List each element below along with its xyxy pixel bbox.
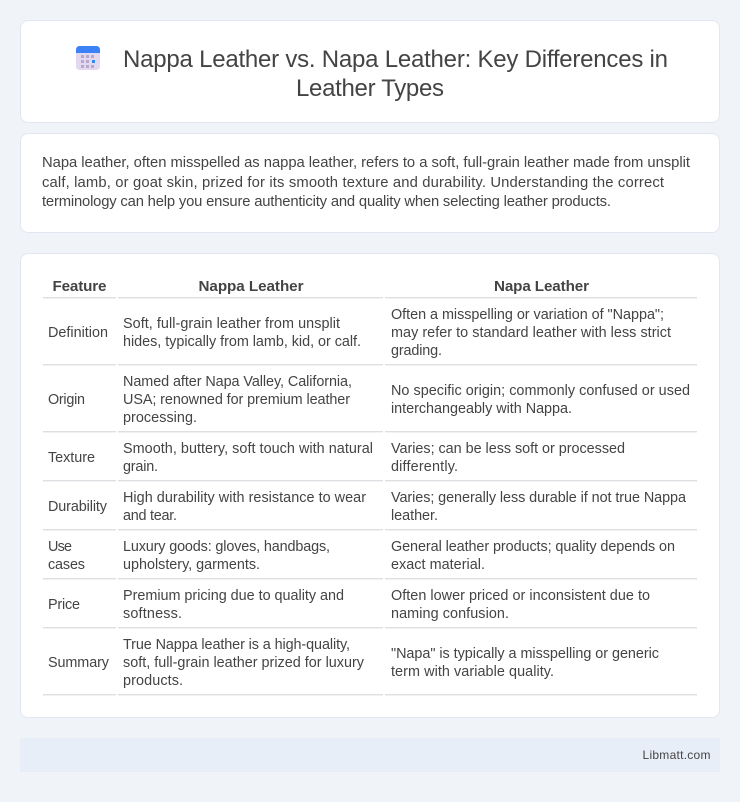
table grid (43, 297, 697, 695)
row: use cases: General leather products; quality depends on (391, 539, 675, 555)
header card (20, 20, 720, 123)
row: texture: differently. (391, 459, 458, 475)
row: origin: Named after Napa Valley, California, (123, 374, 352, 390)
intro text: calf, lamb, or goat skin, prized for its smooth texture and durability. Understanding the correct (42, 175, 664, 191)
intro text (42, 155, 690, 210)
row: definition: hides, typically from lamb, kid, or calf. (123, 334, 361, 350)
title (123, 46, 668, 102)
row: durability: Varies; generally less durable if not true Nappa (391, 490, 686, 506)
row: summary (48, 637, 659, 689)
row: texture: Texture (48, 450, 95, 466)
row: summary: "Napa" is typically a misspelling or generic (391, 646, 659, 662)
table header row: Napa Leather (494, 278, 589, 295)
row: origin: No specific origin; commonly confused or used (391, 383, 690, 399)
title: Leather Types (296, 75, 444, 102)
row: summary: products. (123, 673, 183, 689)
row: definition (48, 307, 671, 359)
row: use cases: cases (48, 557, 85, 573)
row: summary: soft, full-grain leather prized for luxury (123, 655, 365, 671)
row: durability: Durability (48, 499, 108, 515)
table card (20, 253, 720, 718)
row: origin: processing. (123, 410, 197, 426)
row: definition: Soft, full-grain leather from unsplit (123, 316, 340, 332)
footer bar (20, 738, 720, 772)
row: durability: High durability with resistance to wear (123, 490, 366, 506)
row: use cases: Luxury goods: gloves, handbags, (123, 539, 330, 555)
row: durability (48, 490, 686, 524)
row: summary: Summary (48, 655, 110, 671)
row: use cases: Use (48, 539, 72, 555)
row: price: softness. (123, 606, 182, 622)
row: use cases (48, 539, 675, 573)
icon: calendar (76, 46, 100, 70)
table header row (52, 278, 589, 295)
intro card (20, 133, 720, 233)
row: origin: interchangeably with Nappa. (391, 401, 572, 417)
row: price: Often lower priced or inconsistent due to (391, 588, 650, 604)
row: definition: Definition (48, 325, 108, 341)
intro text: Napa leather, often misspelled as nappa leather, refers to a soft, full-grain leather made from unsplit (42, 155, 690, 171)
row: origin (48, 374, 690, 426)
row: origin: USA; renowned for premium leather (123, 392, 350, 408)
row: summary: True Nappa leather is a high-quality, (123, 637, 350, 653)
row: definition: Often a misspelling or variation of "Nappa"; (391, 307, 664, 323)
row: use cases: exact material. (391, 557, 485, 573)
row: price (48, 588, 650, 622)
row: texture: Varies; can be less soft or processed (391, 441, 625, 457)
row: texture: Smooth, buttery, soft touch with natural (123, 441, 373, 457)
intro text: terminology can help you ensure authenticity and quality when selecting leather products. (42, 194, 611, 210)
row: summary: term with variable quality. (391, 664, 554, 680)
table header row: Nappa Leather (198, 278, 304, 295)
row: price: naming confusion. (391, 606, 509, 622)
row: texture: grain. (123, 459, 158, 475)
row: price: Premium pricing due to quality and (123, 588, 344, 604)
row: origin: Origin (48, 392, 85, 408)
row: texture (48, 441, 625, 475)
footer text: Libmatt.com (642, 748, 710, 762)
row: definition: grading. (391, 343, 442, 359)
table header row: Feature (52, 278, 106, 295)
row: durability: and tear. (123, 508, 177, 524)
row: price: Price (48, 597, 80, 613)
row: definition: may refer to standard leather with less strict (391, 325, 671, 341)
row: use cases: upholstery, garments. (123, 557, 260, 573)
row: durability: leather. (391, 508, 438, 524)
title: Nappa Leather vs. Napa Leather: Key Differences in (123, 46, 668, 73)
